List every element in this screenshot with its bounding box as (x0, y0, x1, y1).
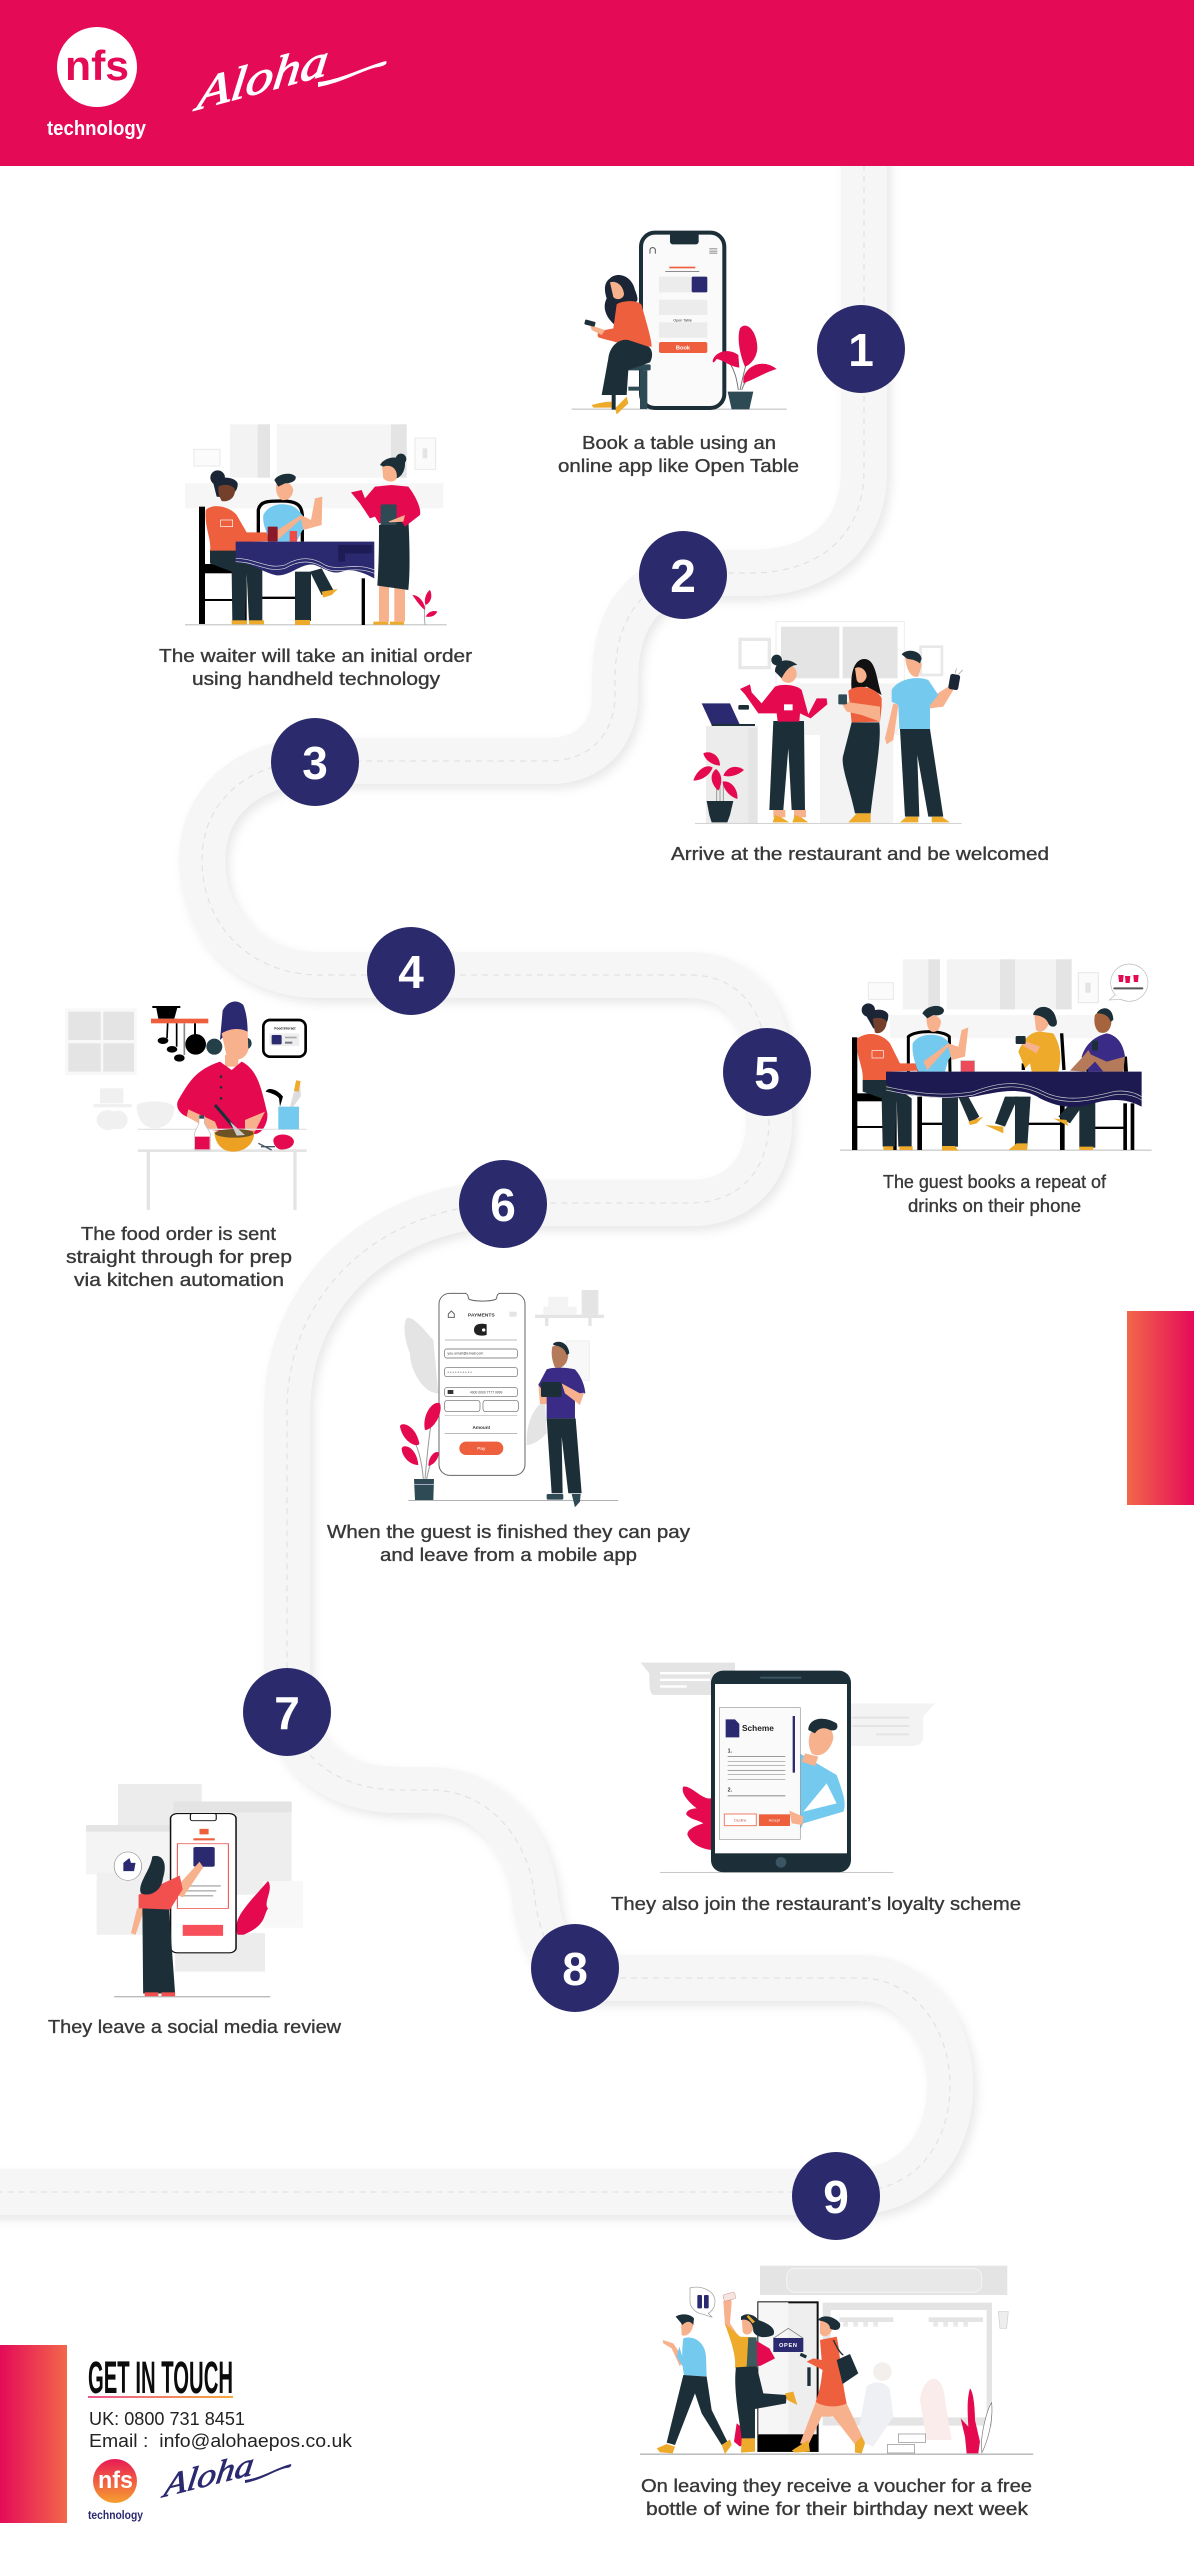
step 1 illustration: booking on phone (572, 232, 787, 414)
social media review illustration (86, 1784, 303, 1997)
loyalty scheme tablet illustration: Decline (734, 1818, 746, 1822)
welcome at restaurant illustration (693, 622, 963, 824)
kitchen chef illustration (65, 1001, 307, 1210)
footer logo: nfs technology: technology (88, 2510, 144, 2522)
email: Email : info@alohaepos.co.uk (89, 2431, 353, 2451)
payment caption: When the guest is finished they can pay (327, 1522, 690, 1542)
logo: nfs technology: nfs (65, 42, 129, 89)
step 1 caption (558, 433, 799, 476)
waiter caption: The waiter will take an initial order (159, 646, 472, 666)
marker 3: 3 (302, 737, 328, 789)
marker 4 (367, 927, 455, 1015)
marker 9 (792, 2152, 880, 2240)
logo: Aloha (191, 33, 387, 121)
marker 2: 2 (670, 550, 696, 602)
guests caption: The guest books a repeat of (883, 1172, 1107, 1192)
kitchen caption: straight through for prep (66, 1247, 292, 1267)
marker 1 (817, 305, 905, 393)
guests caption (883, 1172, 1107, 1216)
footer logo: Aloha (160, 2445, 291, 2505)
mobile payment illustration: you.email@email.com (447, 1352, 483, 1356)
payment caption: and leave from a mobile app (380, 1545, 637, 1565)
decorative gradient block right (1127, 1311, 1194, 1505)
voucher caption (641, 2476, 1032, 2519)
loyalty scheme tablet illustration: Scheme (742, 1723, 774, 1733)
leaving restaurant with voucher illustration: OPEN (779, 2343, 798, 2349)
voucher caption: bottle of wine for their birthday next week (646, 2499, 1029, 2519)
review caption: They leave a social media review (48, 2017, 342, 2037)
leaving restaurant with voucher illustration (640, 2266, 1033, 2455)
marker 5: 5 (754, 1047, 780, 1099)
loyalty scheme tablet illustration: 1. (728, 1748, 733, 1754)
kitchen caption: via kitchen automation (74, 1270, 284, 1290)
payment caption (327, 1522, 690, 1565)
loyalty scheme tablet illustration (641, 1663, 935, 1873)
marker 7 (243, 1668, 331, 1756)
step 1 caption: online app like Open Table (558, 456, 799, 476)
waiter taking order illustration (185, 424, 447, 625)
mobile payment illustration: ********** (447, 1370, 473, 1375)
loyalty scheme tablet illustration: Accept (769, 1819, 780, 1823)
logo: nfs technology: technology (47, 118, 147, 140)
waiter caption: using handheld technology (192, 669, 440, 689)
marker 7: 7 (274, 1687, 300, 1739)
logo: Aloha: Aloha (191, 33, 332, 121)
marker 4: 4 (398, 946, 424, 998)
marker 5 (723, 1028, 811, 1116)
road (0, 150, 950, 2192)
mobile payment illustration: Pay (477, 1446, 486, 1451)
footer gradient block (0, 2345, 67, 2523)
get in touch contact block (88, 2352, 353, 2451)
marker 1: 1 (848, 324, 874, 376)
footer logo: nfs technology (88, 2459, 144, 2522)
get in touch contact block: GET IN TOUCH (88, 2352, 233, 2403)
numbered step markers (243, 305, 905, 2240)
welcome caption: Arrive at the restaurant and be welcomed (671, 844, 1049, 864)
waiter caption (159, 646, 472, 689)
step 1 caption: Book a table using an (582, 433, 776, 453)
step 1 illustration: booking on phone: Open Table (673, 319, 692, 323)
voucher caption: On leaving they receive a voucher for a free (641, 2476, 1032, 2496)
header banner (0, 0, 1194, 166)
mobile payment illustration (400, 1290, 618, 1507)
kitchen caption: The food order is sent (81, 1224, 276, 1244)
mobile payment illustration: Amount (473, 1425, 491, 1430)
phone number: UK: 0800 731 8451 (89, 2409, 245, 2429)
loyalty caption: They also join the restaurant’s loyalty scheme (611, 1894, 1021, 1914)
marker 9: 9 (823, 2171, 849, 2223)
marker 2 (639, 531, 727, 619)
marker 8: 8 (562, 1943, 588, 1995)
marker 6: 6 (490, 1179, 516, 1231)
step 1 illustration: booking on phone: Book (676, 345, 691, 351)
loyalty scheme tablet illustration: 2. (728, 1787, 733, 1793)
footer logo: Aloha: Aloha (160, 2445, 256, 2505)
kitchen caption (66, 1224, 292, 1290)
logo: nfs technology (47, 27, 147, 140)
marker 3 (271, 718, 359, 806)
mobile payment illustration: PAYMENTS (468, 1313, 495, 1319)
marker 8 (531, 1924, 619, 2012)
kitchen chef illustration: Food Interact (274, 1026, 296, 1030)
guests at table illustration (840, 959, 1152, 1151)
guests caption: drinks on their phone (908, 1196, 1081, 1216)
footer logo: nfs technology: nfs (98, 2467, 133, 2494)
mobile payment illustration: 4000 0000 7777 9999 (470, 1391, 503, 1395)
marker 6 (459, 1160, 547, 1248)
